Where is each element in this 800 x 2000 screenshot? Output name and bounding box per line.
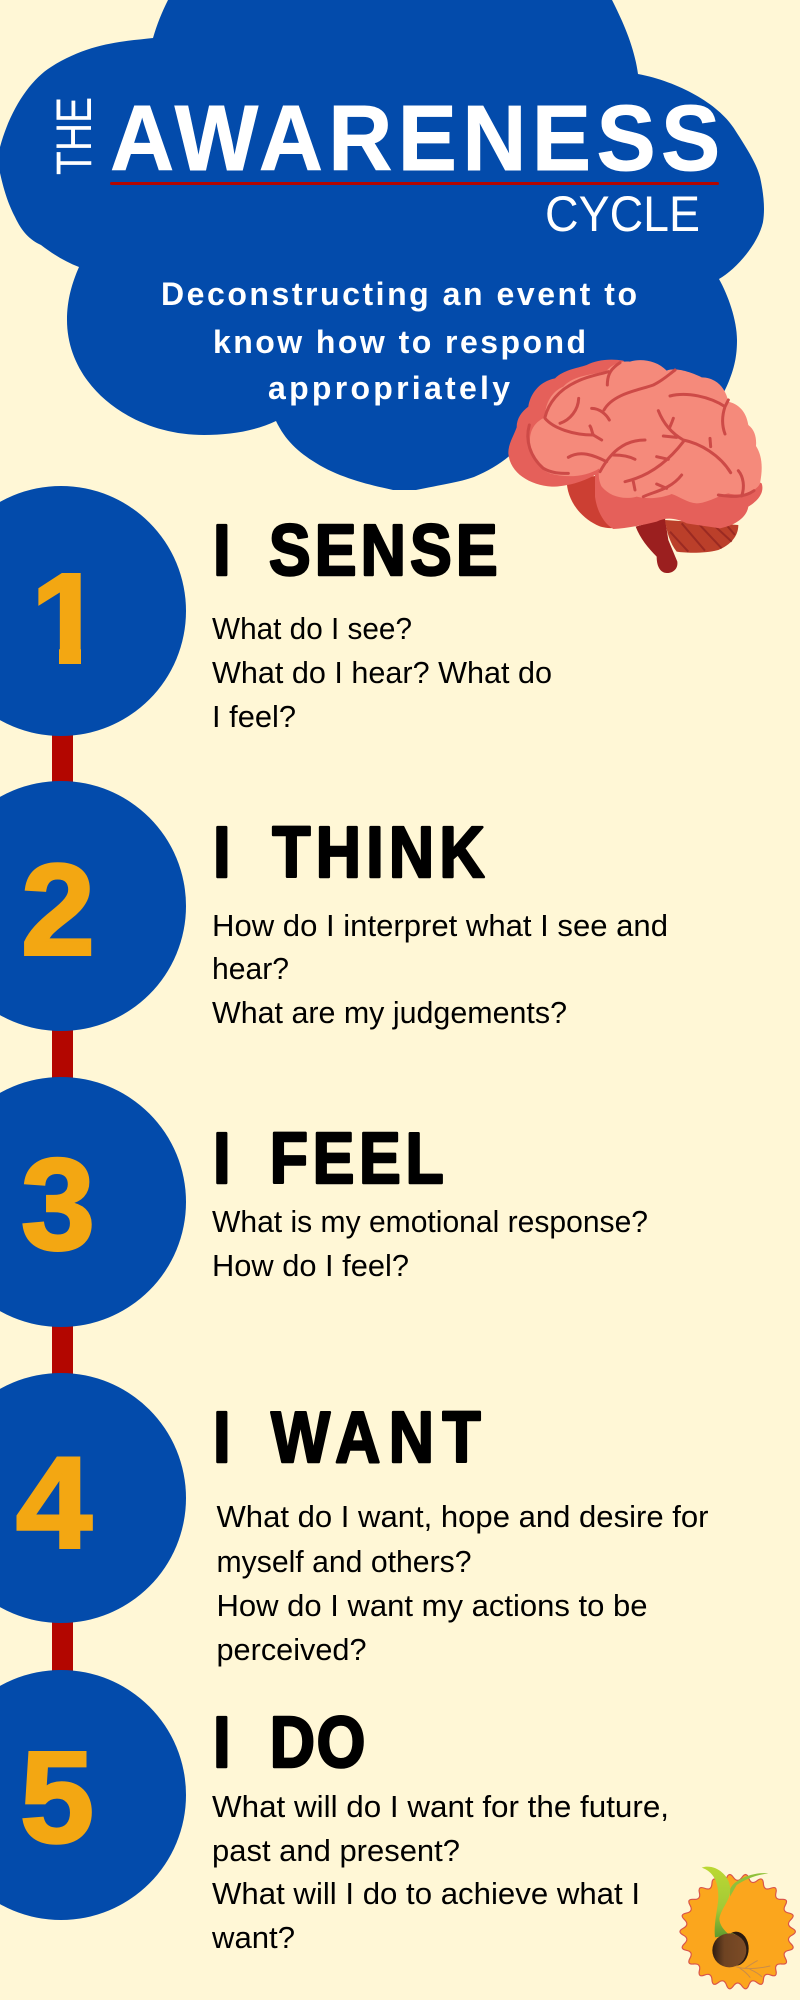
body text [212, 908, 668, 1030]
title underline [110, 182, 719, 185]
number circle 2: 2 [21, 836, 95, 982]
heading: I DO: I [213, 1703, 231, 1783]
body text: What do I see? [212, 611, 412, 646]
heading: I THINK: I [213, 813, 231, 893]
heading: I FEEL: FEEL [270, 1119, 444, 1199]
number circle 1 [0, 486, 186, 736]
number circle 1: 1 [31, 546, 103, 692]
title word: CYCLE: CYCLE [545, 186, 700, 242]
body text: What is my emotional response? [212, 1204, 648, 1239]
heading: I DO: DO [270, 1703, 365, 1783]
number circle 4: 4 [16, 1430, 92, 1576]
step 3 panel [0, 1077, 648, 1327]
body text: What are my judgements? [212, 995, 567, 1030]
body text: What do I hear? What do [212, 655, 552, 690]
subtitle: appropriately [268, 370, 510, 406]
body text: What will do I want for the future, [212, 1789, 669, 1824]
body text [211, 1789, 669, 1955]
number circle 5: 5 [20, 1724, 94, 1870]
header cloud shape [0, 0, 764, 490]
title word: AWARENESS: AWARENESS [110, 87, 720, 191]
body text: perceived? [216, 1632, 366, 1667]
body text: What will I do to achieve what I [212, 1876, 640, 1911]
number circle 3: 3 [21, 1131, 95, 1277]
body text [216, 1499, 708, 1667]
number circle 5 [0, 1670, 186, 1920]
step 4 panel [0, 1373, 708, 1667]
body text: How do I want my actions to be [216, 1588, 648, 1623]
heading: I WANT: I [213, 1398, 231, 1478]
heading: I FEEL: I [213, 1119, 231, 1199]
body text: How do I feel? [212, 1248, 409, 1283]
subtitle: Deconstructing an event to [161, 276, 637, 312]
body text: want? [211, 1920, 295, 1955]
heading: I SENSE: I [213, 511, 231, 591]
title word: THE: THE [46, 97, 102, 175]
body text [212, 1204, 648, 1283]
step 1 panel [0, 486, 552, 736]
body text: past and present? [212, 1833, 460, 1868]
step 2 panel [0, 781, 668, 1031]
step 5 panel [0, 1670, 669, 1955]
body text: I feel? [212, 699, 296, 734]
connector line between number circles [52, 611, 73, 1795]
title block [46, 87, 720, 242]
body text: What do I want, hope and desire for [216, 1499, 708, 1534]
body text: myself and others? [216, 1544, 472, 1579]
icon: brain [508, 360, 762, 573]
body text [212, 611, 552, 734]
heading: I THINK: THINK [272, 813, 485, 893]
subtitle: know how to respond [213, 324, 586, 360]
number circle 2 [0, 781, 186, 1031]
number circle 4 [0, 1373, 186, 1623]
heading: I WANT: WANT [271, 1398, 481, 1478]
subtitle [161, 276, 637, 406]
number circle 3 [0, 1077, 186, 1327]
body text: hear? [212, 951, 289, 986]
icon: seedling badge [680, 1867, 795, 1989]
body text: How do I interpret what I see and [212, 908, 668, 943]
heading: I SENSE: SENSE [269, 511, 498, 591]
